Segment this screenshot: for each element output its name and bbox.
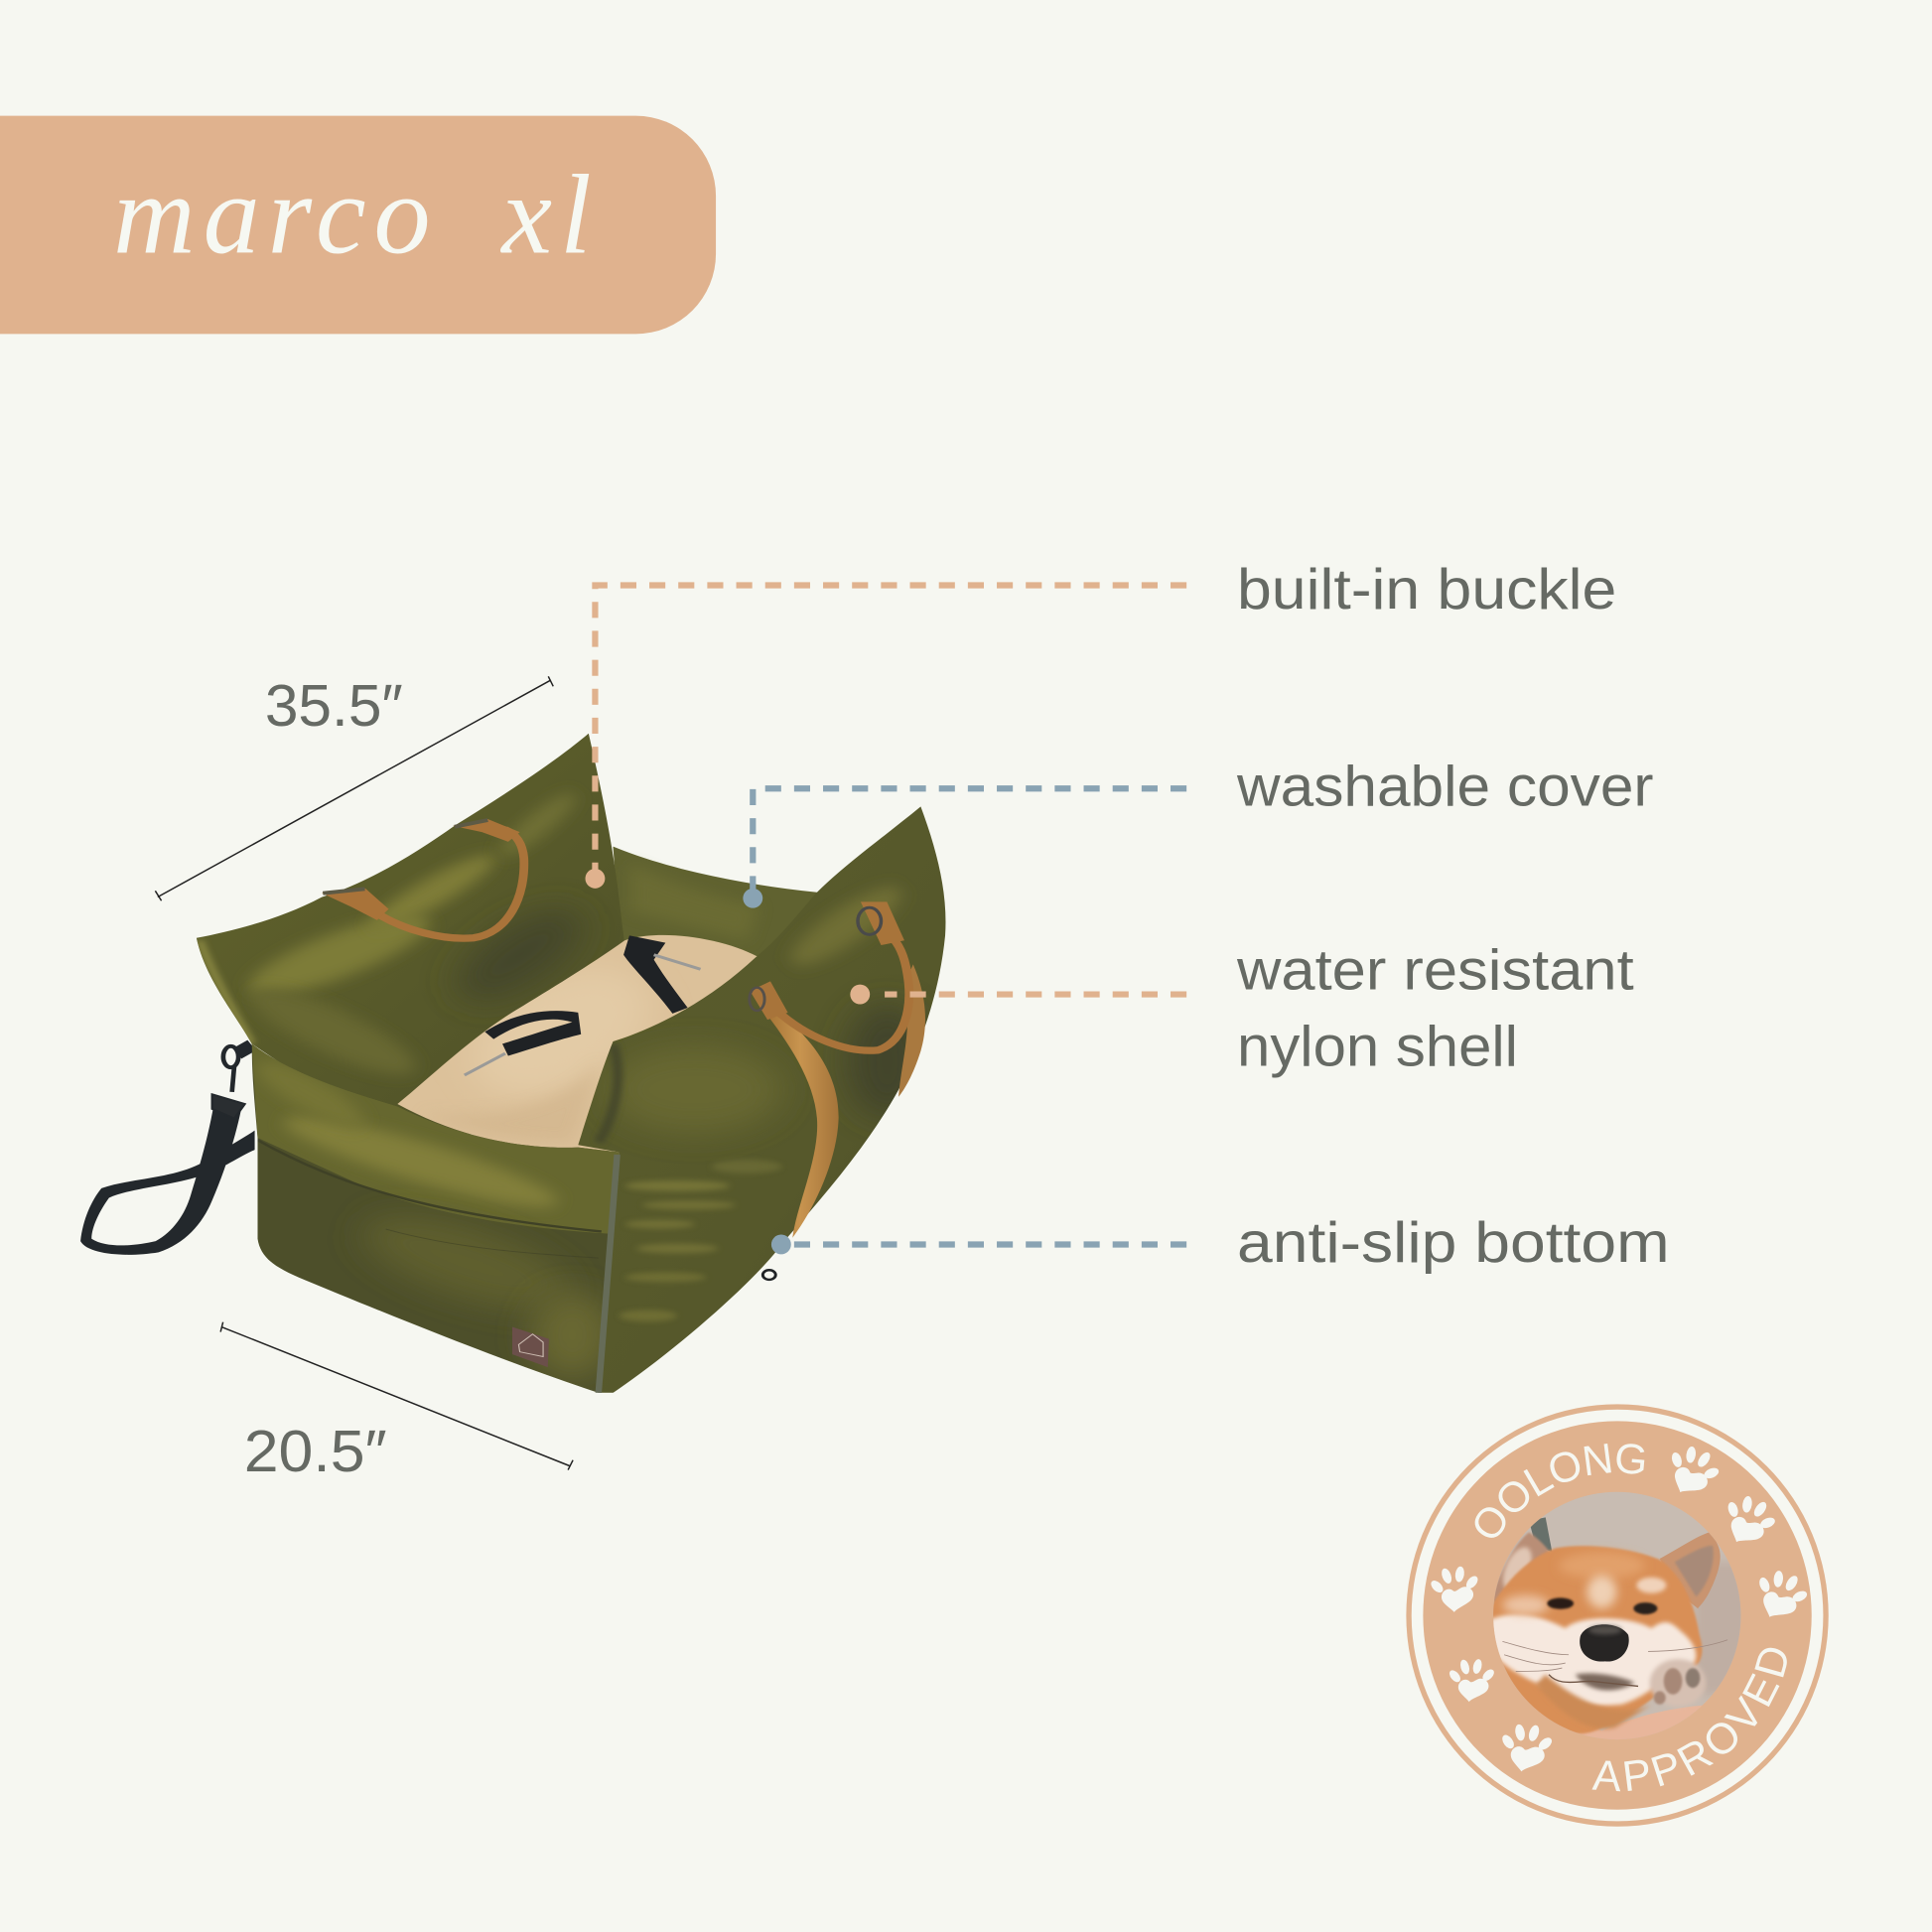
left side bolster: [188, 729, 642, 1138]
title: marco xl: marco xl: [113, 151, 592, 277]
shoulder strap: [80, 1045, 255, 1255]
body and arm: [1579, 1706, 1702, 1739]
left carry handle: [322, 819, 524, 938]
eyes: [1547, 1597, 1574, 1609]
raised paw: [1650, 1659, 1706, 1707]
left ear: [1494, 1531, 1550, 1602]
dog photo: [1493, 1491, 1741, 1739]
sherpa cushion: [397, 935, 757, 1155]
product: olive car seat bed: [80, 729, 957, 1403]
callout: washable cover: [743, 756, 1654, 908]
callout: washable cover: washable cover: [1236, 756, 1654, 819]
dimension: width line: [220, 1322, 573, 1470]
badge text: OOLONG: [1493, 1473, 1650, 1545]
right side bolster: [572, 801, 957, 1398]
callout: water resistant nylon shell: nylon shell: [1237, 1016, 1518, 1079]
right ear: [1660, 1532, 1721, 1608]
whiskers: [1502, 1640, 1727, 1671]
small loop: [762, 1270, 775, 1280]
head: [1486, 1546, 1702, 1733]
white cheeks and muzzle: [1486, 1614, 1696, 1706]
callout: built-in buckle: [586, 558, 1616, 889]
brand tag: [512, 1326, 549, 1367]
callout: water resistant nylon shell: water resistant: [1236, 939, 1634, 1003]
badge: oolong approved: [1406, 1404, 1829, 1827]
zipper: [599, 1155, 618, 1393]
nose: [1580, 1624, 1629, 1662]
back wall of bed: [614, 847, 817, 964]
satin belt straps: [761, 964, 925, 1238]
paw prints: [1427, 1440, 1814, 1771]
callout: built-in buckle: built-in buckle: [1237, 558, 1616, 621]
black seat belt strap front: [465, 1011, 581, 1075]
callout: water resistant nylon shell: [850, 939, 1634, 1079]
right carry handle: [750, 901, 909, 1050]
badge text: APPROVED: [1591, 1641, 1792, 1791]
callout: anti-slip bottom: anti-slip bottom: [1237, 1211, 1670, 1275]
dimension label: 35.5: 35.5″: [265, 672, 403, 739]
front roll and pocket: [246, 1036, 630, 1403]
dimension: length line: [155, 676, 553, 900]
mouth: [1576, 1673, 1635, 1690]
badge: oolong approved: APPROVED: [1592, 1648, 1787, 1791]
callout: anti-slip bottom: [771, 1211, 1670, 1275]
title banner: [0, 116, 716, 334]
dimension label: 20.5: 20.5″: [244, 1418, 387, 1484]
badge: oolong approved: OOLONG: [1475, 1444, 1644, 1538]
black seat belt strap rear: [623, 935, 701, 1014]
